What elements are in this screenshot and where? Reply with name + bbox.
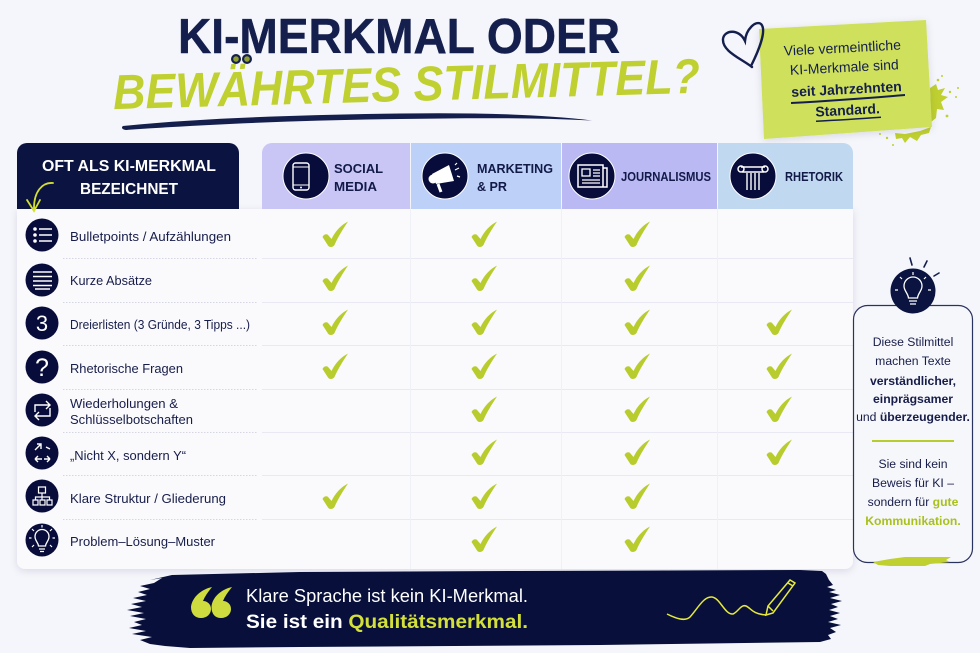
row: Problem-Lösung-Muster: Problem–Lösung–Muster (70, 534, 216, 549)
table panel (17, 209, 853, 569)
brush shape (127, 570, 842, 648)
column header: Journalismus: JOURNALISMUS (621, 170, 711, 184)
card text top: verständlicher, (870, 374, 956, 388)
left header: oft als KI-Merkmal bezeichnet: BEZEICHNET (80, 181, 179, 198)
row: Wiederholungen: Wiederholungen & (70, 396, 178, 411)
row: Rhetorische Fragen (26, 350, 183, 384)
title underline brush (122, 113, 592, 130)
green brush accent (873, 557, 951, 566)
card text bottom: sondern für gute (868, 495, 959, 509)
bottom banner: Sie ist ein Qualitätsmerkmal. (246, 612, 528, 633)
icon: newspaper (569, 153, 615, 199)
card text bottom (865, 457, 961, 528)
card text top: und überzeugender. (856, 410, 970, 424)
card text bottom: Kommunikation. (865, 514, 961, 528)
row: Klare Struktur: Klare Struktur / Gliederung (70, 491, 226, 506)
icon: repeat arrows (26, 394, 58, 426)
icon: org chart (26, 480, 58, 512)
title line 2: BEWÄHRTES STILMITTEL? (112, 50, 701, 120)
sticky note text: Standard. (815, 100, 880, 120)
row: Nicht X, sondern Y: „Nicht X, sondern Y“ (70, 448, 186, 463)
umlaut dots (231, 54, 252, 64)
column header: Social Media: SOCIAL (334, 161, 383, 176)
card text bottom: Beweis für KI – (872, 476, 954, 490)
icon: question mark: ? (35, 354, 49, 382)
column header: Marketing & PR (411, 143, 561, 209)
row: Klare Struktur (26, 480, 226, 512)
icon: column (730, 153, 776, 199)
card text top: machen Texte (875, 354, 951, 368)
checkmarks: Social Media (322, 222, 348, 509)
icon: pen with squiggle (667, 580, 795, 619)
checkmarks: Rhetorik (766, 310, 792, 465)
column header: Rhetorik (718, 143, 853, 209)
divider (872, 440, 954, 442)
icon: yellow arrow (27, 183, 53, 211)
left header: oft als KI-Merkmal bezeichnet (17, 143, 239, 211)
icon: smartphone (283, 153, 329, 199)
column header: Rhetorik: RHETORIK (785, 170, 843, 184)
bottom banner (127, 570, 842, 648)
banner text: Klare Sprache ist kein KI-Merkmal. (246, 585, 528, 606)
icon: number three (26, 306, 58, 340)
card text top (856, 335, 970, 424)
icon: paragraph lines (26, 264, 58, 296)
left header: oft als KI-Merkmal bezeichnet: OFT ALS KI-MERKMAL (42, 158, 216, 175)
sticky note text: Viele vermeintliche (783, 37, 901, 59)
icon: crossing arrows (26, 436, 58, 470)
icon: megaphone (422, 153, 468, 199)
paint splatter (879, 75, 959, 146)
card text top: einprägsamer (873, 392, 953, 406)
card text bottom: Sie sind kein (878, 457, 948, 471)
sticky note (759, 20, 932, 139)
sticky note text: seit Jahrzehnten (791, 78, 902, 100)
icon: light bulb (26, 524, 58, 556)
checkmarks: Marketing & PR (472, 222, 497, 552)
icon: heart (723, 23, 763, 67)
row: Bulletpoints (26, 218, 231, 252)
column header: Social Media (262, 143, 410, 209)
icon: question mark (26, 350, 58, 384)
highlighter underlines (791, 94, 905, 122)
row: Dreierlisten (26, 306, 250, 340)
row: Kurze Absätze: Kurze Absätze (70, 273, 152, 288)
row: Nicht X, sondern Y (26, 436, 186, 470)
side card (854, 258, 972, 566)
icon: bullet list (26, 218, 58, 252)
icon: idea bulb with rays (890, 258, 939, 314)
icon: number three: 3 (36, 311, 48, 336)
row: Wiederholungen: Schlüsselbotschaften (70, 412, 193, 427)
column header: Social Media: MEDIA (334, 179, 378, 194)
row: Dreierlisten: Dreierlisten (3 Gründe, 3 Tipps ...) (70, 317, 250, 332)
title line 1: KI-MERKMAL ODER (178, 10, 620, 64)
row: Problem-Lösung-Muster (26, 524, 216, 556)
grid lines (63, 209, 853, 569)
sticky note text: KI-Merkmale sind (790, 56, 899, 78)
title (112, 10, 701, 130)
checkmarks: Journalismus (624, 222, 650, 552)
sticky note text (783, 37, 905, 121)
column header: Marketing & PR: & PR (477, 179, 508, 194)
column header: Marketing & PR: MARKETING (477, 161, 553, 176)
row: Wiederholungen (26, 394, 193, 427)
row: Bulletpoints: Bulletpoints / Aufzählungen (70, 229, 231, 244)
card text top: Diese Stilmittel (873, 335, 953, 349)
icon: quotation mark (191, 587, 232, 618)
column header: Journalismus (562, 143, 717, 209)
row: Kurze Absätze (26, 264, 152, 296)
row: Rhetorische Fragen: Rhetorische Fragen (70, 361, 183, 376)
